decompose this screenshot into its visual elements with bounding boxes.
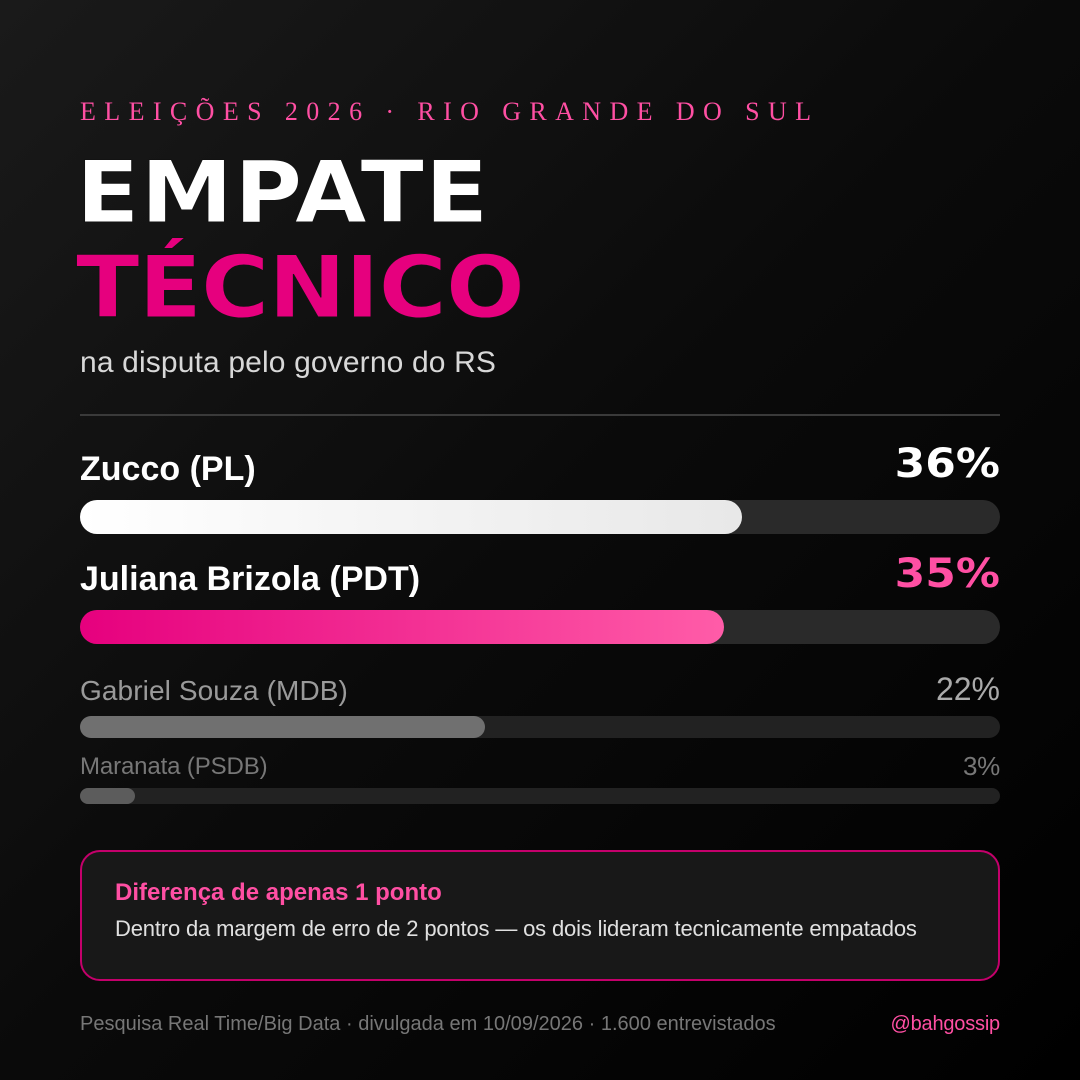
value: 22%: 22% <box>936 671 1000 707</box>
divider <box>80 414 1000 416</box>
title line: TÉCNICO: TÉCNICO <box>76 238 524 337</box>
bar: Maranata 3% <box>80 788 1000 804</box>
bar: Gabriel Souza 22% <box>80 716 1000 738</box>
value: 36%: 36% <box>895 440 1000 487</box>
value: 35%: 35% <box>895 550 1000 597</box>
candidate label: Juliana Brizola: Juliana Brizola (PDT) <box>80 560 420 598</box>
footer source: Pesquisa Real Time/Big Data · divulgada em 10/09/2026 · 1.600 entrevistados <box>80 1013 776 1035</box>
bar fill: Zucco <box>80 500 742 534</box>
candidate label: Maranata: Maranata (PSDB) <box>80 753 267 780</box>
candidate label: Zucco: Zucco (PL) <box>80 450 256 488</box>
bar: Zucco 36% <box>80 500 1000 534</box>
value: 3%: 3% <box>963 751 1000 781</box>
subtitle: na disputa pelo governo do RS <box>80 346 496 379</box>
callout heading: Diferença de apenas 1 ponto <box>115 879 442 906</box>
bar fill: Gabriel Souza <box>80 716 485 738</box>
bar fill: Juliana Brizola <box>80 610 724 644</box>
callout <box>80 850 1000 981</box>
eyebrow: ELEIÇÕES 2026 · RIO GRANDE DO SUL <box>80 97 819 126</box>
callout body: Dentro da margem de erro de 2 pontos — os dois lideram tecnicamente empatados <box>115 916 917 941</box>
footer handle: @bahgossip <box>890 1013 1000 1035</box>
candidate label: Gabriel Souza: Gabriel Souza (MDB) <box>80 675 348 706</box>
bar fill: Maranata <box>80 788 135 804</box>
title line: EMPATE: EMPATE <box>76 143 489 242</box>
bar: Juliana Brizola 35% <box>80 610 1000 644</box>
